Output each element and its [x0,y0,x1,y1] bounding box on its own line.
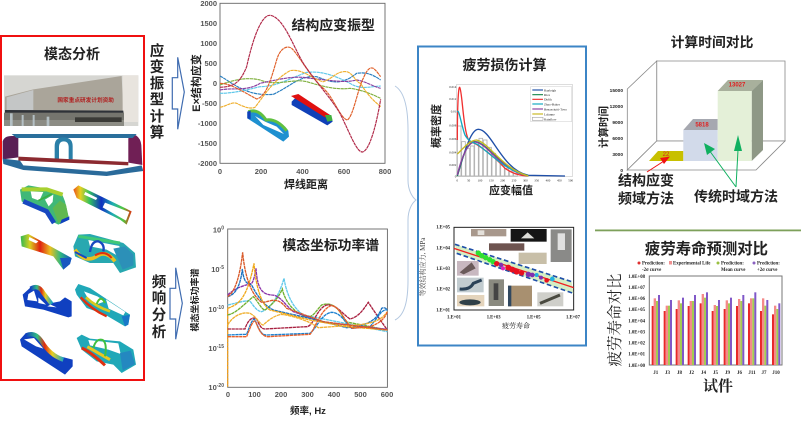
x ticks [457,179,573,183]
y ticks: 0.004 [449,150,457,154]
y axis title: 模态坐标功率谱 [189,268,200,332]
label: strain mode calculation: 算 [150,124,164,142]
histogram [457,126,517,176]
label: frequency domain method [618,172,674,206]
y axis title: 疲劳寿命对比 [605,273,624,367]
label: strain mode calculation [150,42,165,142]
heading: modal analysis: 模态分析 [44,46,100,62]
spectra [228,252,387,387]
x axis ticks: 200 [275,390,287,399]
bar: frequency domain method [649,151,683,161]
x axis title: 频率, Hz [290,405,326,417]
FE mode shape 3 [21,234,72,270]
label: frequency domain method: 结构应变 [618,172,674,188]
arrow: to 13027 bar [734,135,742,187]
x axis ticks [226,390,393,399]
y ticks: 0 [620,168,623,174]
y ticks [610,88,623,174]
heading: 疲劳损伤计算 [462,57,546,73]
y axis title: 等效结构应力, MPa [418,237,427,296]
x ticks: J11 [748,371,756,376]
x ticks [653,371,780,376]
FE mode shape 2 [73,185,132,225]
curves [220,15,381,152]
x ticks: 300 [523,179,528,183]
x axis title: 应变幅值 [489,183,533,197]
y axis ticks: 10 [208,305,217,314]
x ticks: 100 [478,179,483,183]
x ticks: J2 [689,371,694,376]
y ticks: 1.E+04 [436,247,451,252]
FE mode shape 8 [77,335,136,373]
chart: fatigue life bars [605,261,782,395]
x ticks: 1.E+05 [527,315,541,320]
y axis ticks: 10 [208,383,217,392]
legend [638,261,780,273]
x axis ticks: 100 [248,390,261,399]
arrow: frequency response [170,268,182,339]
legend: Prediction: [757,262,780,266]
y axis ticks: -20 [217,383,224,389]
arrow: strain mode [172,57,184,129]
x ticks: J9 [725,371,730,376]
y ticks: 6000 [612,136,623,142]
x ticks: J6 [737,371,742,376]
label: frequency response analysis: 频 [152,274,167,291]
x ticks: 200 [500,179,505,183]
chart: strain amplitude probability density [429,84,573,197]
y ticks: 3000 [612,152,623,158]
y axis ticks: 1000 [200,39,217,48]
FE mode shape 7 [20,333,73,375]
photo: test vehicle: 国家重点研发计划资助 [57,96,114,104]
label: frequency domain method: 频域方法 [618,190,674,206]
label: frequency response analysis: 响 [152,289,166,307]
y ticks: 1.0E+05 [628,308,646,313]
x ticks: 1.E+03 [487,315,501,320]
brace connector [395,86,416,320]
legend: Rice [544,93,551,97]
y axis ticks: -2000 [198,159,217,168]
x axis ticks: 800 [379,167,391,176]
x ticks: J5 [713,371,718,376]
x axis ticks: 600 [338,167,350,176]
chart: modal coordinate power spectrum [189,226,393,417]
y ticks: 0.006 [449,137,457,141]
x axis ticks: 0 [218,167,222,176]
y axis ticks: 0 [221,226,224,232]
inset: FE beam shapes [247,94,333,142]
bar: time domain 5818 [683,119,718,161]
y ticks: 1.0E+00 [628,364,646,369]
x axis ticks [218,167,391,176]
y axis ticks: 1500 [200,19,217,28]
label: strain mode calculation: 振 [150,74,165,92]
bars [652,292,780,365]
FE mode shape 4 [73,234,136,273]
specimen photos [457,229,572,306]
model: finite element carriage [3,134,143,176]
y ticks: 1.E+05 [436,226,451,231]
x axis title: 焊线距离 [284,177,328,191]
y axis ticks [208,226,224,392]
FE mode shape 1 [20,185,69,225]
y ticks: 0.002 [449,163,457,167]
x axis ticks: 0 [226,390,230,399]
legend: Zhao-Baker [544,102,561,106]
bar: time domain 5818: 5818 [695,122,709,128]
y axis ticks: 10 [211,265,220,274]
legend: -2σ curve [642,268,661,273]
x ticks: J4 [701,371,706,376]
y ticks: 1.E+01 [436,308,451,313]
chart: 3D computation time bars [597,61,785,206]
y axis ticks: -5 [220,265,224,271]
bar: time domain 13027 [718,80,763,161]
x ticks: 50 [467,179,471,183]
x ticks: J7 [762,371,767,376]
y axis ticks: -10 [217,305,224,311]
legend: Lalanne [544,112,555,116]
legend: Rainflow [544,117,557,121]
x axis ticks: 200 [255,167,267,176]
chart: fatigue life scatter with specimens [418,226,581,330]
y ticks: 1.0E+06 [628,297,646,302]
x axis ticks: 600 [381,390,393,399]
label: strain mode calculation: 计 [150,108,165,126]
x axis title: 试件 [703,378,733,395]
x ticks: J3 [665,371,670,376]
y axis ticks: -15 [217,344,224,350]
legend: Rayleigh [544,88,556,92]
arrow: to frequency method [647,156,670,172]
y axis ticks: 10 [208,344,217,353]
bar: frequency domain method: 22 [663,152,670,158]
legend: Prediction: [721,262,744,266]
x ticks [447,315,581,320]
x ticks: J8 [677,371,682,376]
legend: Prediction: [642,262,665,266]
legend: Experimental Life [673,262,710,266]
FE mode shape 5 [23,286,72,317]
panel: fatigue damage calculation [418,46,586,346]
chart title: 结构应变振型 [292,17,375,33]
legend: Dirlik [544,98,552,102]
FE mode shape 6 [75,284,130,326]
y axis title: E×结构应变 [189,54,203,112]
x ticks: J1 [653,371,659,376]
y axis ticks: -1000 [198,119,217,128]
x axis ticks: 300 [301,390,314,399]
label: strain mode calculation: 应 [150,42,164,60]
y ticks: 0.008 [449,124,457,128]
bar: time domain 13027: 13027 [729,82,746,88]
x ticks: 0 [457,179,459,183]
label: time domain method: 传统时域方法 [694,188,778,204]
chart: structural strain mode shapes [189,0,391,191]
chart title: 模态坐标功率谱 [282,237,379,253]
x axis title: 疲劳寿命 [502,321,530,330]
x ticks: 1.E+01 [447,315,462,320]
panel: modal analysis [1,36,144,380]
y ticks: 15000 [610,88,623,94]
label: frequency response analysis [152,274,167,341]
label: frequency response analysis: 分 [152,307,167,324]
y ticks: 1.0E+07 [628,286,646,291]
y ticks: 0.014 [449,85,457,89]
chart walls [627,61,785,170]
y ticks: 9000 [612,120,623,126]
y axis ticks: -500 [202,99,217,108]
y axis ticks [198,0,217,168]
legend [531,87,572,122]
x ticks: 350 [534,179,539,183]
arrow: to 5818 bar [704,143,736,187]
x ticks: 450 [557,179,562,183]
y ticks: 0.01 [451,110,457,114]
y axis ticks: 10 [213,226,221,234]
legend: Mean curve [721,268,745,273]
y ticks: 12000 [610,104,623,110]
x ticks: 400 [546,179,551,183]
y ticks: 1.E+03 [436,267,451,272]
y ticks: 1.0E+01 [628,352,646,358]
label: frequency response analysis: 析 [152,323,167,341]
x ticks: 250 [512,179,517,183]
scatter band [455,244,573,293]
x ticks: 500 [568,179,573,183]
y ticks: 1.0E+02 [628,342,646,346]
legend: Benasciutti-Tovo [544,107,567,111]
y axis title: 概率密度 [429,104,443,148]
y axis ticks: 0 [213,79,217,88]
y ticks: 0 [455,174,457,178]
y ticks: 1.E+02 [436,288,451,293]
heading: computation time comparison: 计算时间对比 [671,34,754,50]
y ticks: 0.012 [449,97,457,101]
x axis ticks: 400 [328,390,340,399]
y axis ticks: 500 [204,59,217,68]
y axis ticks: -1500 [198,139,217,148]
y ticks: 1.0E+04 [628,320,646,324]
density curves [457,87,565,176]
y ticks [449,85,457,178]
label: strain mode calculation: 变 [150,58,164,76]
y axis title: 计算时间 [597,106,610,148]
label: strain mode calculation: 型 [150,92,164,108]
y ticks: 1.0E+08 [628,275,646,280]
photo: test vehicle [4,75,138,126]
y ticks: 1.0E+03 [628,330,646,336]
data points [476,250,555,283]
x axis ticks: 400 [296,167,309,176]
divider [595,230,801,231]
heading: fatigue life prediction comparison: 疲劳寿命预测对比 [645,239,768,258]
x ticks: 150 [489,179,494,183]
x ticks: 1.E+07 [566,315,581,320]
y ticks [628,275,646,369]
x axis ticks: 500 [354,390,367,399]
legend: +2σ curve [757,268,777,273]
x ticks: J10 [772,371,780,376]
y ticks [436,226,451,313]
